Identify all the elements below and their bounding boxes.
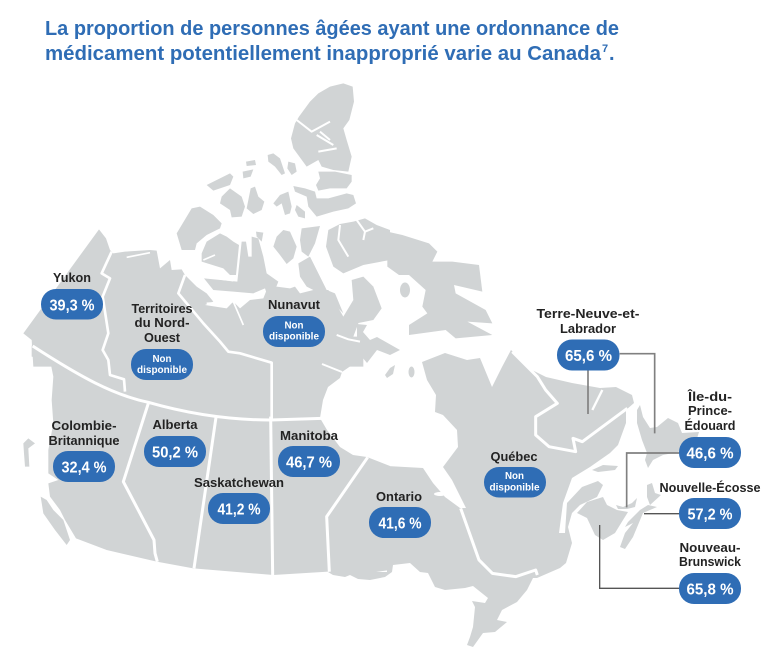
title: La proportion de personnes âgées ayant une ordonnance de <box>45 18 619 40</box>
connector lines <box>588 354 679 588</box>
region: Nunavut <box>263 298 325 347</box>
region: Colombie-Britannique: Colombie- <box>52 419 116 433</box>
region: Territoires du Nord-Ouest: du Nord- <box>134 316 190 330</box>
region: Terre-Neuve-et-Labrador: Labrador <box>560 322 616 336</box>
region: Nouvelle-Écosse: Nouvelle-Écosse <box>660 480 761 495</box>
region: Terre-Neuve-et-Labrador: 65,6 % <box>565 348 612 365</box>
Southampton and Hudson Bay islands <box>357 324 400 363</box>
region: Colombie-Britannique: 32,4 % <box>62 460 107 476</box>
Ontario, Quebec and Labrador <box>328 350 634 647</box>
region: Île-du-Prince-Édouard: Prince- <box>688 404 732 418</box>
region: Yukon: 39,3 % <box>50 298 95 314</box>
region: Québec: Québec <box>490 450 538 464</box>
region: Colombie-Britannique <box>48 419 120 482</box>
New Brunswick <box>577 497 628 540</box>
region: Nunavut: disponible <box>269 332 319 342</box>
region: Ontario: 41,6 % <box>378 516 422 532</box>
region: Manitoba: 46,7 % <box>286 454 332 472</box>
region: Nunavut: Non <box>284 320 304 332</box>
region: Manitoba: Manitoba <box>280 429 339 443</box>
provincial borders and channels <box>33 120 627 577</box>
region: Territoires du Nord-Ouest: Territoires <box>132 302 193 316</box>
region: Yukon: Yukon <box>53 271 91 285</box>
region: Alberta: 50,2 % <box>152 444 198 462</box>
region: Terre-Neuve-et-Labrador: Terre-Neuve-et- <box>536 307 640 321</box>
region: Alberta: Alberta <box>152 418 199 432</box>
lake <box>434 492 446 496</box>
region: Île-du-Prince-Édouard: Île-du- <box>687 389 732 404</box>
region: Québec <box>484 450 546 498</box>
region: Saskatchewan: 41,2 % <box>218 502 261 518</box>
title <box>45 18 619 65</box>
region: Nouveau-Brunswick: Nouveau- <box>680 541 740 555</box>
map of Canada <box>23 83 699 647</box>
region: Territoires du Nord-Ouest <box>131 302 193 380</box>
region: Ontario <box>369 490 431 538</box>
region: Nouveau-Brunswick <box>679 541 741 604</box>
region: Nouveau-Brunswick: 65,8 % <box>686 582 734 598</box>
region: Nunavut: Nunavut <box>268 298 321 312</box>
region: Saskatchewan <box>194 476 284 524</box>
region: Colombie-Britannique: Britannique <box>48 434 120 448</box>
title: médicament potentiellement inapproprié varie au Canada <box>45 43 602 65</box>
region: Yukon <box>41 271 103 320</box>
region: Territoires du Nord-Ouest: Ouest <box>144 331 181 345</box>
region: Île-du-Prince-Édouard <box>679 389 741 468</box>
region: Île-du-Prince-Édouard: 46,6 % <box>686 446 734 462</box>
region: Nouvelle-Écosse <box>660 480 761 529</box>
region: Saskatchewan: Saskatchewan <box>194 476 284 490</box>
region: Territoires du Nord-Ouest: Non <box>152 354 172 365</box>
Anticosti <box>592 465 618 472</box>
Nova Scotia <box>620 505 657 549</box>
region: Nouveau-Brunswick: Brunswick <box>679 555 741 569</box>
region: Manitoba <box>278 429 340 477</box>
region: Nouvelle-Écosse: 57,2 % <box>688 506 733 524</box>
Baffin Island south <box>387 232 492 338</box>
Newfoundland <box>637 405 699 468</box>
region: Québec: disponible <box>490 482 540 494</box>
region: Québec: Non <box>505 471 524 482</box>
title: . <box>609 43 615 65</box>
region: Terre-Neuve-et-Labrador <box>536 307 640 370</box>
region: Territoires du Nord-Ouest: disponible <box>137 365 187 376</box>
title: 7 <box>602 43 608 55</box>
Prince Edward Island <box>616 498 637 509</box>
region: Alberta <box>144 418 206 467</box>
region: Ontario: Ontario <box>376 490 422 504</box>
region: Île-du-Prince-Édouard: Édouard <box>684 418 736 433</box>
